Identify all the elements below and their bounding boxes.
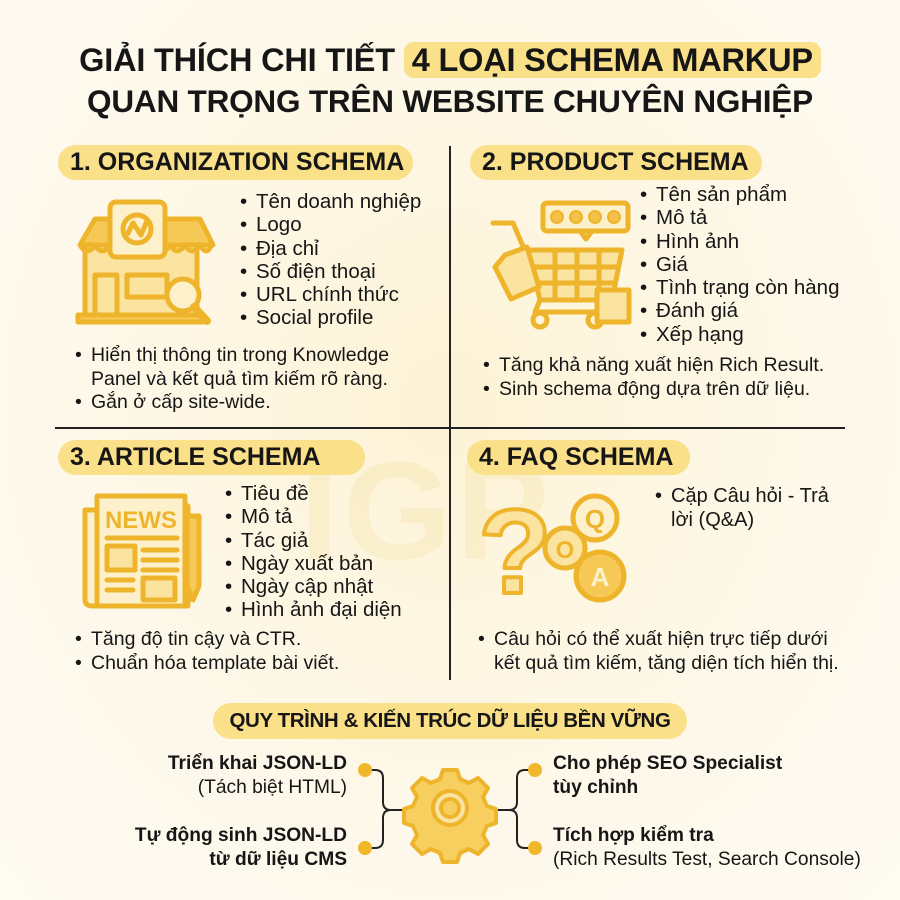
- list: Đánh giá: [656, 299, 738, 322]
- watermark: IGP: [300, 432, 553, 589]
- list: Địa chỉ: [256, 237, 319, 260]
- title: QUAN TRỌNG TRÊN WEBSITE CHUYÊN NGHIỆP: [87, 83, 813, 119]
- list: Cặp Câu hỏi - Trả lời (Q&A): [671, 485, 829, 530]
- benefits: Sinh schema động dựa trên dữ liệu.: [499, 378, 810, 400]
- panel: product: [470, 145, 840, 400]
- list: Tên sản phẩm: [656, 183, 787, 206]
- panel: organization: [58, 145, 421, 413]
- step: test: [553, 825, 861, 870]
- step: json-ld: (Tách biệt HTML): [198, 777, 347, 798]
- heading: [213, 703, 687, 739]
- icon: faq: O: [556, 537, 574, 564]
- step: json-ld: Triển khai JSON-LD: [168, 753, 347, 774]
- benefits: Chuẩn hóa template bài viết.: [91, 652, 339, 674]
- list: Tình trạng còn hàng: [656, 276, 840, 299]
- connectors and gear: [358, 763, 542, 864]
- heading: 4. FAQ SCHEMA: [479, 443, 673, 471]
- divider horizontal: [55, 427, 845, 429]
- icon: faq: Q: [585, 504, 605, 534]
- list: Số điện thoại: [256, 260, 376, 283]
- list: URL chính thức: [256, 283, 399, 306]
- benefits: [76, 628, 339, 674]
- list: [640, 183, 840, 346]
- step: test: (Rich Results Test, Search Console): [553, 849, 861, 870]
- benefits: Câu hỏi có thể xuất hiện trực tiếp dưới kết quả tìm kiếm, tăng diện tích hiển thị.: [494, 628, 839, 674]
- list: Ngày xuất bản: [241, 552, 373, 575]
- step: auto: Tự động sinh JSON-LD: [135, 825, 347, 846]
- list: Hình ảnh: [656, 230, 739, 253]
- step: auto: [135, 825, 347, 870]
- title: GIẢI THÍCH CHI TIẾT 4 LOẠI SCHEMA MARKUP: [79, 42, 813, 78]
- list: Ngày cập nhật: [241, 575, 373, 598]
- step: json-ld: [168, 753, 347, 798]
- list: Hình ảnh đại diện: [241, 598, 402, 621]
- step: seo: tùy chỉnh: [553, 777, 638, 798]
- icon: cart: [490, 200, 632, 330]
- panel: article: [58, 440, 402, 674]
- list: Tên doanh nghiệp: [256, 190, 421, 213]
- heading: [58, 440, 365, 475]
- panel: faq: [467, 440, 839, 674]
- icon: newspaper: NEWS: [105, 507, 177, 534]
- heading: 2. PRODUCT SCHEMA: [482, 148, 749, 176]
- icon: faq: A: [591, 562, 610, 592]
- list: Xếp hạng: [656, 323, 744, 346]
- list: Social profile: [256, 306, 373, 329]
- icon: store: [76, 200, 216, 325]
- list: Mô tả: [241, 505, 292, 528]
- section: process: [135, 703, 861, 870]
- step: seo: Cho phép SEO Specialist: [553, 753, 782, 774]
- step: auto: từ dữ liệu CMS: [209, 849, 347, 870]
- icon: newspaper: [82, 494, 202, 608]
- list: Mô tả: [656, 206, 707, 229]
- benefits: [484, 354, 824, 400]
- step: seo: [553, 753, 782, 798]
- list: Giá: [656, 253, 688, 276]
- icon: faq: [478, 488, 626, 613]
- step: test: Tích hợp kiểm tra: [553, 825, 714, 846]
- heading: [467, 440, 690, 475]
- list: [226, 482, 402, 621]
- title: [79, 42, 821, 119]
- benefits: [76, 344, 389, 413]
- list: [240, 190, 421, 329]
- heading: 3. ARTICLE SCHEMA: [70, 443, 320, 471]
- heading: 1. ORGANIZATION SCHEMA: [70, 148, 404, 176]
- benefits: Gắn ở cấp site-wide.: [91, 391, 271, 413]
- divider vertical: [449, 146, 451, 680]
- list: Logo: [256, 213, 302, 236]
- benefits: Tăng độ tin cậy và CTR.: [91, 628, 301, 650]
- list: Tiêu đề: [241, 482, 309, 505]
- benefits: Hiển thị thông tin trong Knowledge Panel và kết quả tìm kiếm rõ ràng.: [91, 344, 389, 390]
- heading: QUY TRÌNH & KIẾN TRÚC DỮ LIỆU BỀN VỮNG: [230, 709, 670, 732]
- list: Tác giả: [241, 529, 308, 552]
- benefits: Tăng khả năng xuất hiện Rich Result.: [499, 354, 824, 376]
